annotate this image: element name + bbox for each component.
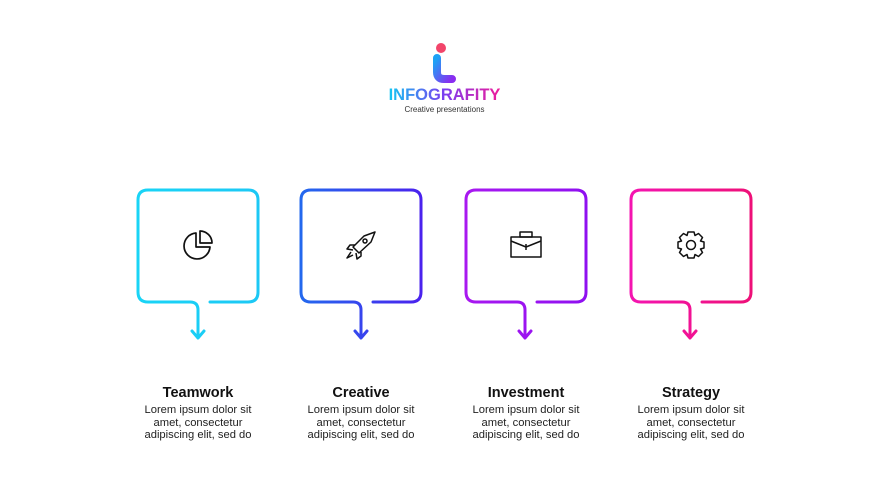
text: strategy: Strategy bbox=[662, 385, 720, 401]
text: creative: adipiscing elit, sed do bbox=[308, 429, 414, 441]
panel: investment box bbox=[466, 190, 586, 338]
text: investment: adipiscing elit, sed do bbox=[472, 429, 579, 441]
text: creative: Creative bbox=[332, 385, 390, 401]
logo text: INFOGRAFITY bbox=[389, 86, 500, 104]
text: strategy: Lorem ipsum dolor sit bbox=[638, 404, 744, 416]
text: investment: Investment bbox=[488, 385, 564, 401]
tagline: Creative presentations bbox=[404, 105, 485, 114]
text: creative: Lorem ipsum dolor sit bbox=[308, 404, 414, 416]
text: investment bbox=[472, 385, 580, 441]
text: teamwork bbox=[144, 385, 252, 441]
text: investment: amet, consectetur bbox=[482, 416, 570, 428]
icon: gear bbox=[678, 232, 704, 258]
text: teamwork: Teamwork bbox=[163, 385, 233, 401]
icon: briefcase bbox=[511, 232, 541, 257]
text: creative: amet, consectetur bbox=[317, 416, 405, 428]
icon: rocket bbox=[347, 232, 375, 259]
text: teamwork: Lorem ipsum dolor sit bbox=[145, 404, 251, 416]
panel: creative box bbox=[301, 190, 421, 338]
text: strategy: adipiscing elit, sed do bbox=[638, 429, 744, 441]
text: teamwork: amet, consectetur bbox=[154, 416, 242, 428]
text: creative bbox=[308, 385, 414, 441]
icon: pie chart bbox=[184, 231, 212, 259]
logo bbox=[389, 43, 500, 114]
text: strategy: amet, consectetur bbox=[647, 416, 735, 428]
panel: teamwork box bbox=[138, 190, 258, 338]
text: teamwork: adipiscing elit, sed do bbox=[144, 429, 251, 441]
logo icon bbox=[436, 43, 452, 79]
panel: strategy box bbox=[631, 190, 751, 338]
text: strategy bbox=[638, 385, 744, 441]
text: investment: Lorem ipsum dolor sit bbox=[473, 404, 579, 416]
